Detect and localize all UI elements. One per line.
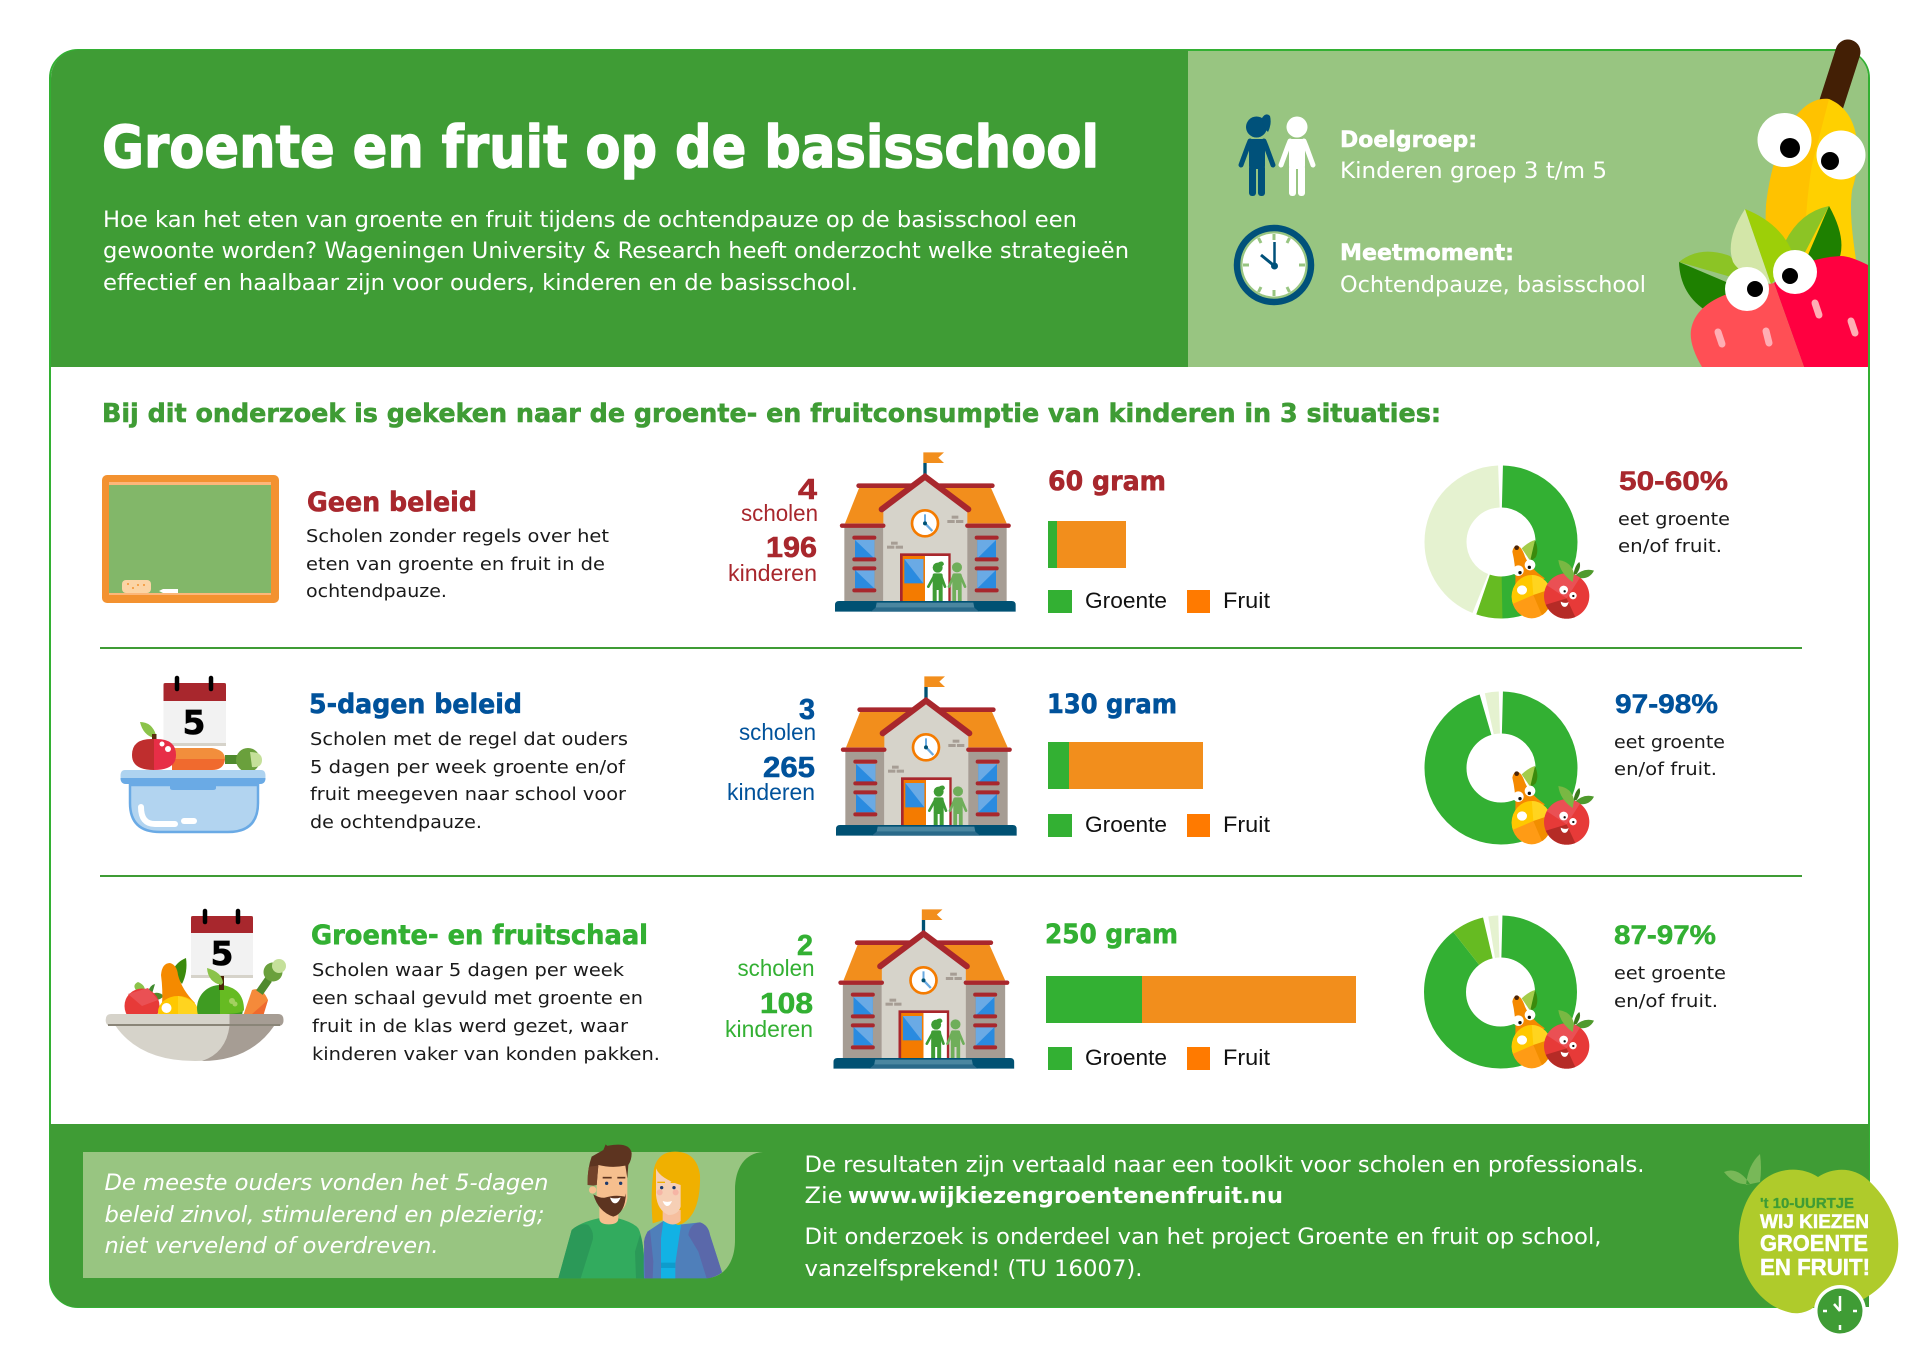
woman — [644, 1152, 722, 1278]
apple shape — [1739, 1170, 1898, 1313]
heading and description: 5 dagen per week groente en/of — [310, 757, 626, 778]
section heading: Bij dit onderzoek is gekeken naar de groente- en fruitconsumptie van kinderen in 3 situaties: — [102, 399, 1441, 429]
icon: calendar and fruit bowl: 5 — [211, 934, 233, 973]
panel: footer — [50, 1124, 1869, 1307]
school and child counts: scholen — [738, 955, 814, 981]
school and child counts: kinderen — [725, 1016, 813, 1042]
icon: chalkboard — [102, 475, 279, 603]
badge text: EN FRUIT! — [1760, 1254, 1870, 1280]
heading and description: Scholen waar 5 dagen per week — [312, 960, 625, 981]
school and child counts: 3 — [799, 694, 815, 726]
icon: school — [836, 676, 1017, 836]
panel: row groente- en fruitschaal — [106, 909, 1726, 1073]
heading and description: 5-dagen beleid — [309, 689, 522, 720]
school and child counts: 4 — [798, 474, 817, 506]
heading and description: kinderen vaker van konden pakken. — [312, 1044, 660, 1065]
heading and description: een schaal gevuld met groente en — [312, 988, 643, 1009]
man — [558, 1144, 645, 1278]
percentage text: en/of fruit. — [1614, 991, 1718, 1012]
measuring moment text: Meetmoment: — [1340, 241, 1514, 266]
icon: school — [835, 452, 1016, 612]
bar chart: 60 gram — [1048, 466, 1270, 613]
heading and description — [309, 689, 628, 833]
intro text: effectief en haalbaar zijn voor ouders, kinderen en de basisschool. — [103, 271, 858, 296]
panel: target group and measuring moment — [1188, 51, 1868, 367]
heading and description — [311, 920, 660, 1065]
bar chart: 250 gram — [1045, 919, 1356, 1070]
school and child counts — [725, 930, 814, 1042]
target group text: Doelgroep: — [1340, 128, 1477, 153]
panel: row 5-dagen beleid — [120, 676, 1725, 849]
heading and description: ochtendpauze. — [306, 581, 447, 602]
icon: pear and apple mascots — [1510, 990, 1594, 1073]
callout: parents quote: beleid zinvol, stimulerend en plezierig; — [104, 1203, 544, 1228]
school and child counts: scholen — [741, 500, 818, 526]
percentage text — [1614, 689, 1725, 780]
divider — [100, 875, 1802, 877]
school and child counts: 196 — [766, 532, 817, 564]
icon: banana and strawberry mascots — [1679, 52, 1868, 367]
divider — [100, 647, 1802, 649]
school and child counts: 265 — [763, 752, 815, 784]
badge text: GROENTE — [1760, 1230, 1868, 1256]
target group text: Kinderen groep 3 t/m 5 — [1340, 159, 1607, 184]
icon: children — [1241, 114, 1313, 196]
callout: parents quote: De meeste ouders vonden het 5-dagen — [104, 1171, 548, 1196]
school and child counts — [728, 474, 818, 586]
percentage text — [1614, 920, 1726, 1012]
intro text — [103, 208, 1129, 296]
percentage text: eet groente — [1614, 963, 1726, 984]
badge text: 't 10-UURTJE — [1760, 1195, 1854, 1212]
toolkit text: Dit onderzoek is onderdeel van het project Groente en fruit op school, — [804, 1225, 1602, 1250]
illustration: parents — [558, 1144, 722, 1278]
panel: row geen beleid — [102, 452, 1730, 623]
donut chart: 87-97% — [1445, 936, 1556, 1048]
icon: calendar and lunchbox: 5 — [183, 703, 205, 742]
toolkit text: vanzelfsprekend! (TU 16007). — [804, 1257, 1142, 1282]
callout: parents quote: niet vervelend of overdreven. — [104, 1234, 438, 1259]
logo badge — [1724, 1154, 1898, 1337]
bar chart: 250 gram: 250 gram — [1045, 919, 1178, 950]
measuring moment text: Ochtendpauze, basisschool — [1340, 273, 1646, 298]
heading and description: Scholen zonder regels over het — [306, 526, 609, 547]
bar chart: 130 gram: 130 gram — [1047, 689, 1177, 720]
title: Groente en fruit op de basisschool — [102, 113, 1099, 181]
icon: calendar and lunchbox — [120, 678, 266, 832]
school and child counts: 2 — [797, 930, 813, 962]
icon: calendar and fruit bowl — [106, 911, 286, 1061]
bar chart: 130 gram — [1047, 689, 1270, 837]
icon: clock — [1237, 228, 1311, 302]
heading and description: de ochtendpauze. — [310, 812, 482, 833]
percentage text: 97-98% — [1615, 689, 1718, 719]
heading and description: Groente- en fruitschaal — [311, 920, 648, 951]
icon: leaf — [1724, 1154, 1761, 1185]
bar chart: 60 gram: 60 gram — [1048, 466, 1166, 497]
icon: pear and apple mascots — [1510, 540, 1594, 623]
percentage text: eet groente — [1618, 509, 1730, 530]
school and child counts: kinderen — [727, 779, 815, 805]
heading and description: fruit in de klas werd gezet, waar — [312, 1016, 629, 1037]
heading and description — [306, 487, 609, 602]
toolkit text — [804, 1153, 1644, 1282]
header background — [51, 50, 1188, 367]
toolkit text: www.wijkiezengroentenenfruit.nu — [848, 1184, 1283, 1209]
donut chart: 50-60% — [1446, 486, 1556, 598]
icon: badge clock — [1814, 1285, 1866, 1337]
school and child counts — [727, 694, 816, 805]
icon: school — [833, 909, 1014, 1069]
measuring moment text — [1340, 241, 1646, 298]
school and child counts: 108 — [760, 988, 813, 1020]
callout: parents quote — [83, 1152, 763, 1278]
badge text — [1760, 1195, 1870, 1280]
percentage text — [1618, 466, 1730, 557]
toolkit text: Zie — [804, 1184, 842, 1209]
toolkit text: De resultaten zijn vertaald naar een toolkit voor scholen en professionals. — [804, 1153, 1644, 1178]
percentage text: 87-97% — [1614, 920, 1716, 950]
heading and description: Geen beleid — [307, 487, 477, 518]
percentage text: 50-60% — [1619, 466, 1728, 496]
percentage text: en/of fruit. — [1614, 759, 1717, 780]
percentage text: en/of fruit. — [1618, 536, 1722, 557]
heading and description: fruit meegeven naar school voor — [310, 784, 627, 805]
target group text — [1340, 128, 1607, 184]
panel: header — [51, 50, 1188, 367]
heading and description: Scholen met de regel dat ouders — [310, 729, 628, 750]
school and child counts: kinderen — [728, 560, 817, 586]
icon: pear and apple mascots — [1510, 766, 1594, 849]
badge text: WIJ KIEZEN — [1760, 1211, 1869, 1233]
heading and description: eten van groente en fruit in de — [306, 554, 605, 575]
percentage text: eet groente — [1614, 732, 1725, 753]
donut chart: 97-98% — [1446, 712, 1556, 824]
intro text: gewoonte worden? Wageningen University & Research heeft onderzocht welke strategieën — [103, 239, 1129, 264]
intro text: Hoe kan het eten van groente en fruit tijdens de ochtendpauze op de basisschool een — [103, 208, 1077, 233]
school and child counts: scholen — [739, 719, 816, 745]
